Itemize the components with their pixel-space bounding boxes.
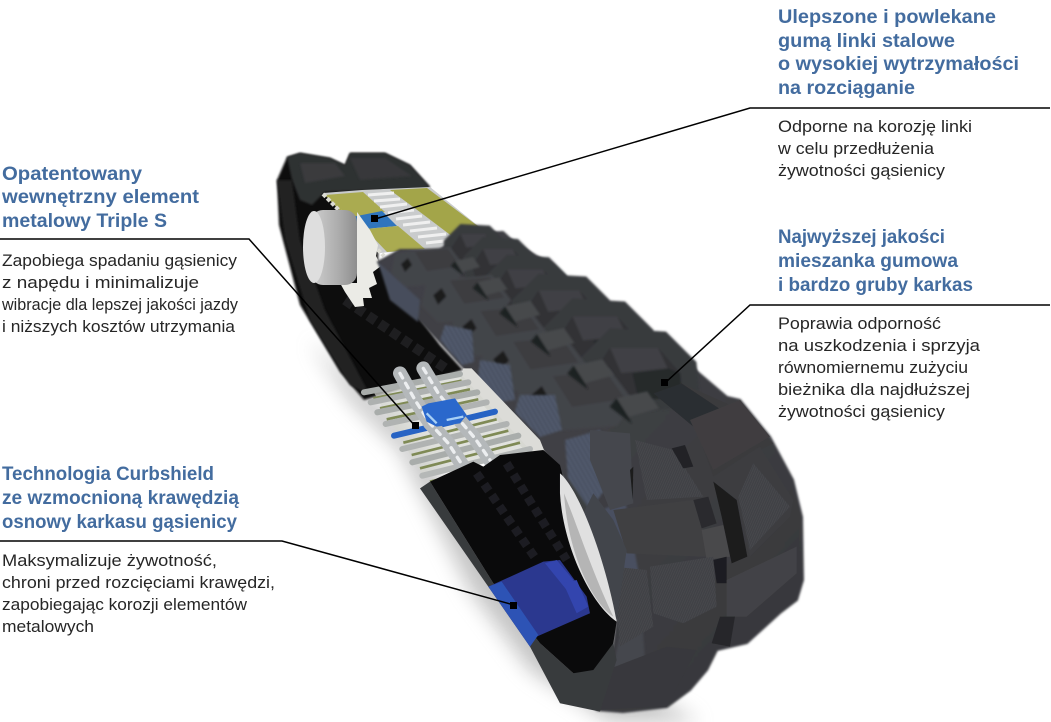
ribbed side panels of the front lugs xyxy=(590,400,793,563)
callout: rubber compound xyxy=(661,226,1050,421)
track drop shadow xyxy=(310,340,700,722)
text: steel cords: w celu przedłużenia xyxy=(777,140,935,158)
text: steel cords: Odporne na korozję linki xyxy=(778,118,972,136)
tread lug blocks, outer row xyxy=(444,224,700,415)
tread lug blocks, inner row xyxy=(391,247,635,432)
heading: steel cords: gumą linki stalowe xyxy=(778,30,955,52)
text: Triple S: z napędu i minimalizuje xyxy=(2,274,199,292)
heading: rubber compound: mieszanka gumowa xyxy=(778,250,958,272)
text: Triple S: wibracje dla lepszej jakości jazdy xyxy=(1,296,239,314)
text: rubber compound xyxy=(778,315,981,421)
text: Curbshield xyxy=(2,552,275,636)
callout: Triple S xyxy=(0,163,419,429)
heading: steel cords: o wysokiej wytrzymałości xyxy=(778,53,1019,75)
heading: Triple S xyxy=(1,163,200,232)
heading: Curbshield: ze wzmocnioną krawędzią xyxy=(2,487,239,509)
blue-grey ribbed tread edge xyxy=(378,262,645,672)
text: rubber compound: równomiernemu zużyciu xyxy=(778,359,968,377)
heading: steel cords xyxy=(778,6,1019,99)
heading: Triple S: metalowy Triple S xyxy=(2,210,167,232)
heading: Curbshield: osnowy karkasu gąsienicy xyxy=(2,511,237,533)
text: Triple S: i niższych kosztów utrzymania xyxy=(2,318,236,336)
text: Curbshield: Maksymalizuje żywotność, xyxy=(2,552,217,570)
text: rubber compound: żywotności gąsienicy xyxy=(778,403,946,421)
text: Curbshield: zapobiegając korozji elementów xyxy=(2,596,247,614)
heading: steel cords: na rozciąganie xyxy=(778,77,915,99)
heading: rubber compound: Najwyższej jakości xyxy=(778,226,945,248)
text: steel cords: żywotności gąsienicy xyxy=(778,162,946,180)
callout: Curbshield xyxy=(0,463,517,636)
text: Triple S: Zapobiega spadaniu gąsienicy xyxy=(2,252,238,270)
text: rubber compound: bieżnika dla najdłuższej xyxy=(778,381,970,399)
text: Curbshield: chroni przed rozcięciami krawędzi, xyxy=(2,574,275,592)
rubber track illustration xyxy=(277,153,803,712)
text: rubber compound: na uszkodzenia i sprzyja xyxy=(778,337,981,355)
lower front tread lugs xyxy=(580,493,797,710)
text: Triple S xyxy=(1,252,239,336)
drive wheel and sprocket xyxy=(303,210,381,307)
rear upper section of the track xyxy=(277,153,463,400)
heading: rubber compound xyxy=(778,226,973,296)
blue Curbshield reinforcement xyxy=(488,560,590,647)
text: rubber compound: Poprawia odporność xyxy=(778,315,941,333)
exposed yellow belt with steel cords xyxy=(323,187,487,256)
main tread surface xyxy=(378,224,803,712)
callout: steel cords xyxy=(371,6,1050,222)
heading: Curbshield xyxy=(2,463,239,533)
metal guides cluster xyxy=(400,368,490,467)
heading: Triple S: Opatentowany xyxy=(2,163,142,185)
centre chain of tread bricks xyxy=(451,257,659,424)
lower inner section, white wheel and black guide lugs xyxy=(420,450,617,712)
large lug at the front of the tread xyxy=(653,383,773,477)
heading: Curbshield: Technologia Curbshield xyxy=(2,463,214,485)
text: Curbshield: metalowych xyxy=(2,618,94,636)
text: steel cords xyxy=(777,118,972,180)
heading: steel cords: Ulepszone i powlekane xyxy=(778,6,996,28)
heading: rubber compound: i bardzo gruby karkas xyxy=(778,274,973,296)
exposed Triple S metal element with steel rods xyxy=(364,368,547,482)
heading: Triple S: wewnętrzny element xyxy=(1,186,200,208)
